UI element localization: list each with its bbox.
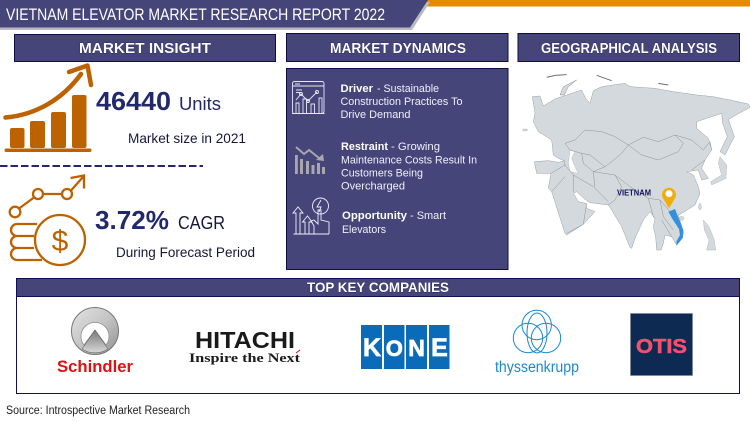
islands — [522, 80, 727, 250]
stat: market size: Units — [179, 94, 221, 114]
logo: kone: N — [408, 335, 425, 361]
logo: hitachi — [189, 327, 301, 365]
text: restraint — [341, 141, 477, 192]
heading: top key companies: TOP KEY COMPANIES — [307, 279, 449, 295]
stat: market size — [96, 86, 246, 146]
logo: schindler: Schindler — [57, 357, 133, 376]
icon: coins and growth line: $ — [52, 225, 69, 258]
text: restraint: Customers Being — [341, 168, 423, 180]
logo: otis: OTIS — [636, 336, 687, 358]
title banner — [0, 0, 430, 30]
text: restraint: Overcharged — [341, 180, 405, 192]
stat: CAGR — [95, 205, 255, 260]
text: restraint: Maintenance Costs Result In — [341, 154, 477, 166]
text: opportunity: - Smart — [410, 210, 446, 222]
logo: thyssenkrupp — [495, 310, 579, 376]
panel heading: market insight — [14, 34, 276, 62]
text: driver: Construction Practices To — [340, 96, 462, 108]
stat: market size: Market size in 2021 — [128, 130, 246, 146]
vietnam highlight — [668, 209, 683, 246]
icon: falling bars — [295, 147, 325, 174]
panel heading: market dynamics — [286, 34, 508, 62]
panel heading: market dynamics: MARKET DYNAMICS — [330, 40, 466, 57]
text: opportunity: Elevators — [342, 224, 386, 236]
text: opportunity: Opportunity — [342, 210, 408, 222]
panel heading: geographical analysis — [518, 34, 740, 62]
source note: Source: Introspective Market Research — [6, 405, 190, 417]
panel heading: market insight: MARKET INSIGHT — [79, 40, 211, 57]
icon: opportunity hand and arrows — [293, 198, 329, 234]
icon: coins and growth line — [10, 176, 85, 265]
stat: CAGR: CAGR — [178, 213, 225, 233]
text: restraint: Restraint — [341, 141, 388, 153]
map label: vietnam: VIETNAM — [617, 188, 651, 198]
map: asia with vietnam highlighted — [522, 75, 750, 250]
map pin — [662, 188, 676, 208]
stat: CAGR: 3.72% — [95, 205, 169, 235]
caspian sea — [568, 150, 578, 173]
logo: kone: E — [431, 334, 448, 362]
mainland asia — [532, 83, 750, 250]
icon: analytics dashboard — [292, 82, 324, 114]
arctic islands — [547, 75, 668, 85]
panel: top key companies — [16, 278, 740, 394]
logo: thyssenkrupp: thyssenkrupp — [495, 359, 579, 376]
logo: schindler — [57, 308, 133, 376]
text: opportunity — [342, 210, 446, 236]
logo: kone: O — [386, 336, 403, 361]
text: driver — [340, 83, 462, 121]
stat: CAGR: During Forecast Period — [116, 244, 255, 260]
text: driver: - Sustainable — [377, 83, 439, 95]
icon: rising bar chart — [4, 66, 92, 152]
logo: hitachi: HITACHI — [195, 327, 295, 353]
logo: otis — [630, 314, 692, 376]
stat: market size: 46440 — [96, 86, 171, 116]
logo: kone: K — [363, 334, 381, 362]
logo: kone — [361, 325, 450, 369]
logo: hitachi: Inspire the Next — [189, 350, 301, 365]
text: driver: Drive Demand — [340, 109, 410, 121]
panel: market dynamics content — [286, 68, 508, 270]
panel heading: geographical analysis: GEOGRAPHICAL ANALYSIS — [541, 41, 717, 57]
orange top bar — [420, 0, 750, 6]
text: restraint: - Growing — [391, 141, 440, 153]
text: driver: Driver — [340, 83, 374, 95]
title banner: VIETNAM ELEVATOR MARKET RESEARCH REPORT 2022 — [6, 5, 385, 24]
national borders — [551, 130, 712, 237]
